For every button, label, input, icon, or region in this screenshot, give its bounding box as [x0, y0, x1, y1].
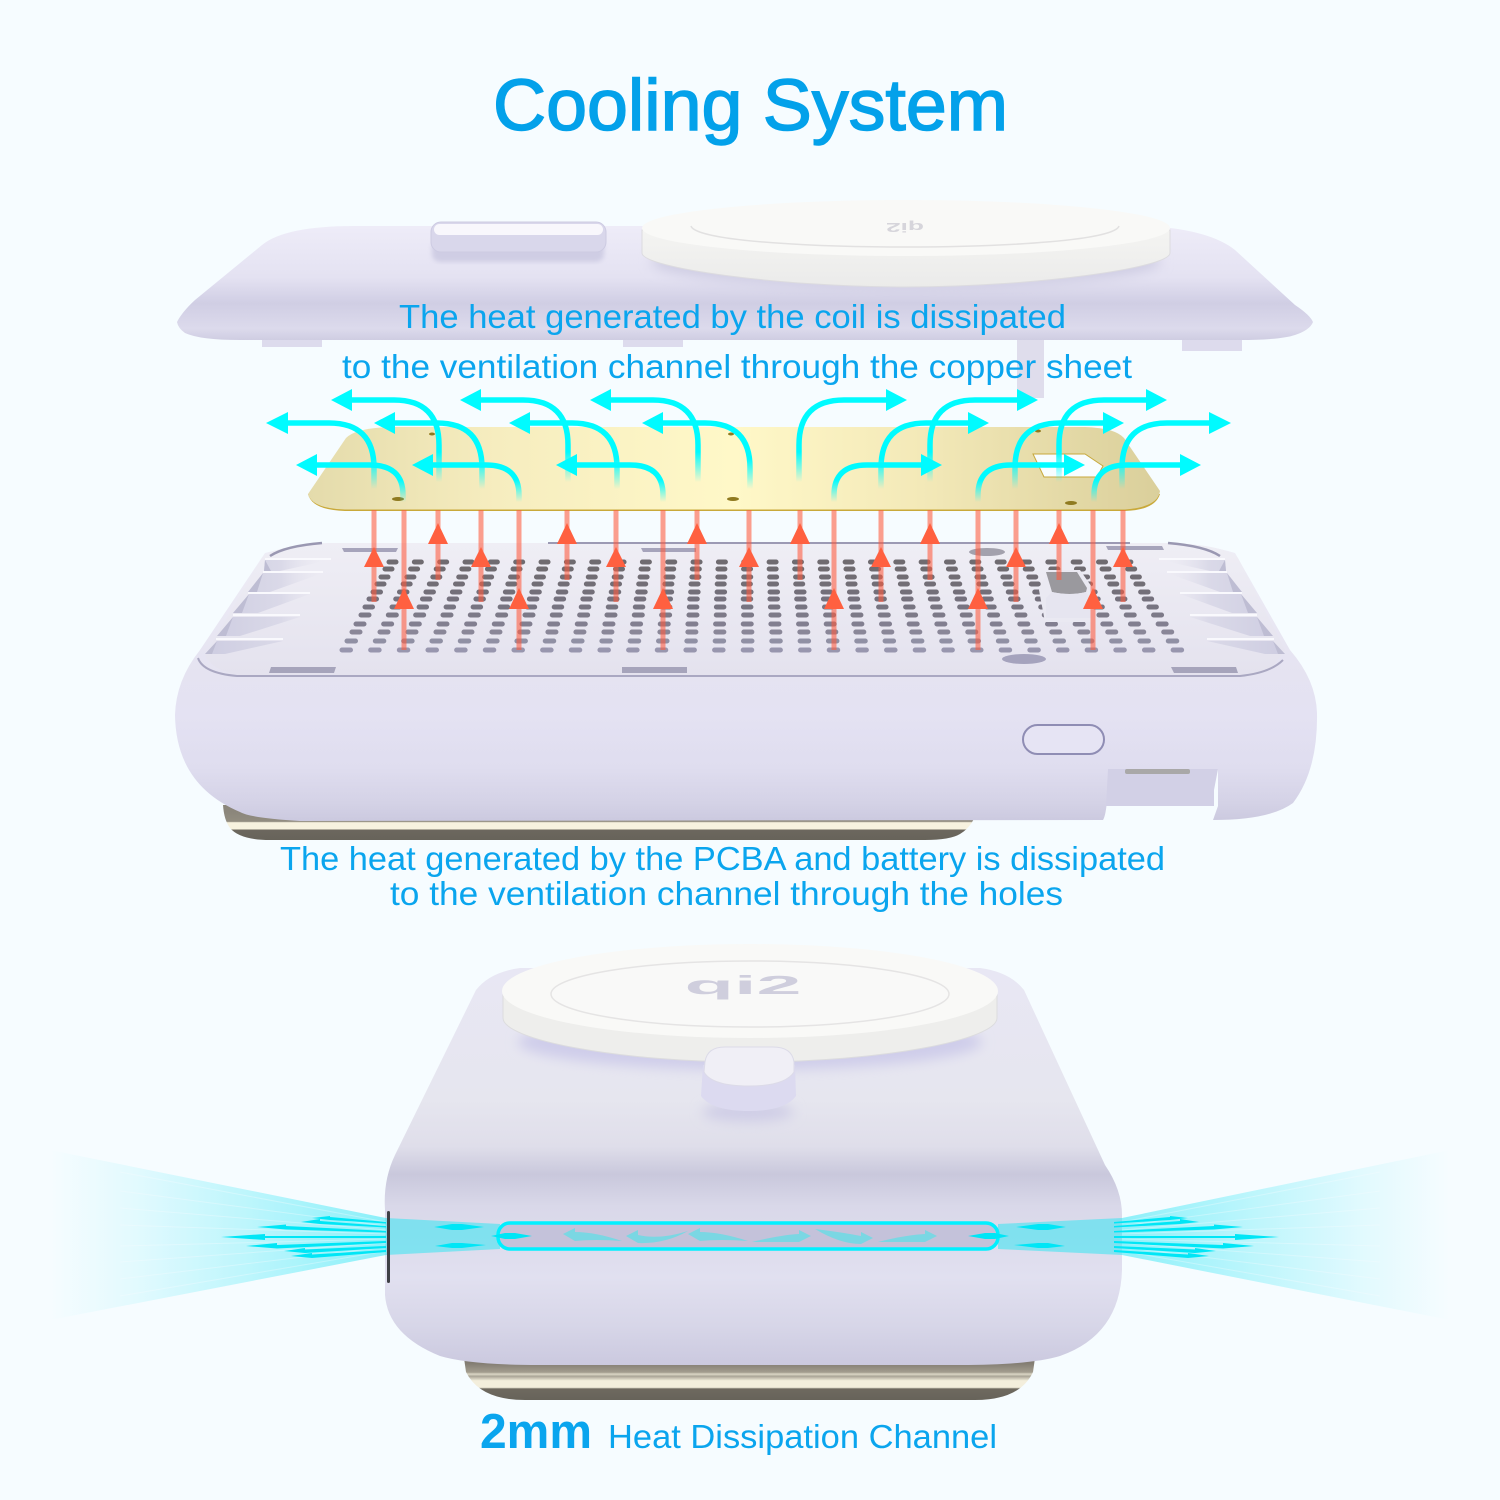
disc shadow	[518, 1014, 982, 1070]
caption line 2: to the ventilation channel through the copper sheet	[342, 348, 1132, 385]
metal base strip	[223, 805, 978, 840]
right beam through body	[998, 1218, 1122, 1255]
airflow curves left	[286, 400, 750, 502]
screw hole bottom	[1002, 654, 1046, 664]
cyan airflow arrows going left	[266, 389, 750, 502]
disc top inner ring	[691, 226, 1119, 247]
heat arrow heads	[364, 523, 1133, 609]
disc wall	[642, 230, 1170, 287]
face bottom edge	[198, 658, 1283, 676]
screw hole top	[969, 548, 1005, 556]
disc wall	[503, 992, 997, 1062]
lid clips	[262, 338, 1242, 351]
disc top	[642, 200, 1170, 256]
right flow arrows	[968, 1216, 1279, 1258]
sheet cutout	[1033, 454, 1103, 477]
button shadow	[702, 1102, 794, 1122]
vent hole grid	[342, 562, 1182, 650]
left beam through body	[386, 1218, 500, 1255]
side button	[1023, 725, 1104, 754]
metal base	[464, 1358, 1035, 1400]
lid button pad	[431, 222, 606, 262]
port recess	[1106, 769, 1218, 806]
ventilation channels left	[205, 543, 331, 654]
caption: coil heat	[342, 298, 1132, 385]
bottom label	[480, 1405, 997, 1459]
airflow curves right	[799, 400, 1211, 502]
side port	[387, 1211, 390, 1283]
left flow arrows	[221, 1216, 532, 1258]
airflow heads left	[266, 389, 663, 476]
top vent face	[205, 543, 1285, 677]
sheet surface	[308, 427, 1160, 510]
caption line 1: The heat generated by the PCBA and battery is dissipated	[280, 840, 1165, 877]
face top edge	[548, 542, 1130, 544]
disc top	[502, 944, 998, 1038]
channel slot	[498, 1223, 998, 1249]
qi2 logo: qi2	[684, 971, 802, 1000]
red heat arrows rising from vent holes	[364, 510, 1133, 650]
socket post	[1039, 570, 1094, 622]
caption: PCBA heat	[280, 840, 1165, 912]
qi2 logo small: qi2	[886, 220, 924, 234]
2mm emphasis: 2mm	[480, 1405, 592, 1459]
channel flow marks right	[752, 1229, 937, 1244]
ventilation channels right	[1159, 543, 1285, 654]
heat arrow shafts	[374, 510, 1123, 650]
disc inner ring	[551, 961, 949, 1027]
copper sheet	[308, 427, 1160, 511]
right air fan	[1122, 1150, 1450, 1320]
caption line 1: The heat generated by the coil is dissipated	[399, 298, 1066, 335]
channel label: Heat Dissipation Channel	[608, 1418, 997, 1455]
device lid with wireless charging disc	[177, 200, 1313, 398]
heat dissipation channel airflow	[50, 1150, 1450, 1320]
port contact	[1125, 769, 1190, 774]
assembled device	[385, 944, 1122, 1400]
mounting slots	[269, 546, 1238, 673]
left air fan	[50, 1150, 386, 1320]
airflow heads right	[886, 389, 1231, 476]
disc shadow	[651, 236, 1161, 288]
screw points	[392, 430, 1077, 505]
lower housing with vented top face	[175, 542, 1317, 840]
sheet edge	[308, 494, 1160, 511]
support post	[1017, 340, 1044, 398]
title: Cooling System	[493, 66, 1008, 146]
caption line 2: to the ventilation channel through the holes	[390, 875, 1063, 912]
button	[701, 1047, 796, 1111]
device body	[385, 968, 1122, 1365]
housing body	[175, 543, 1317, 821]
cyan airflow arrows going right	[799, 389, 1231, 502]
lid body	[177, 226, 1313, 340]
channel flow marks left	[563, 1228, 748, 1243]
